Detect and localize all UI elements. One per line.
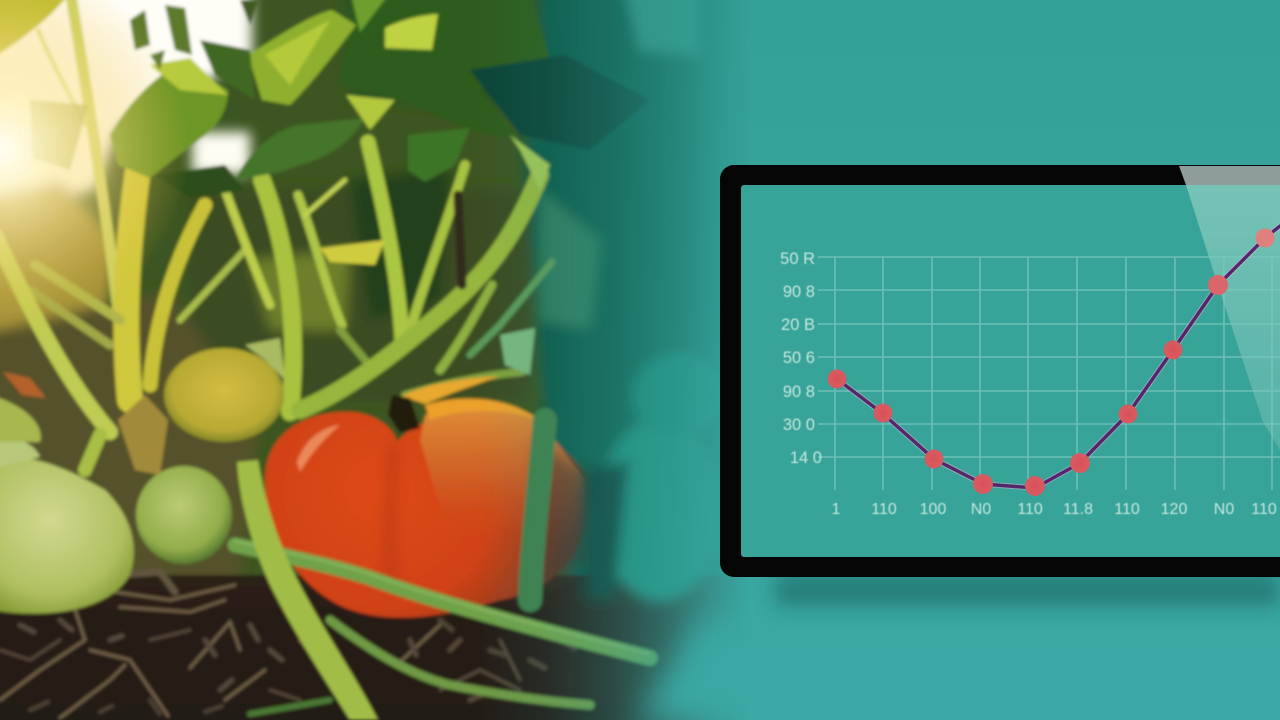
front stems and vines xyxy=(85,420,650,714)
x axis labels: 110 xyxy=(1114,501,1140,518)
y axis labels: 50 6 xyxy=(783,349,815,367)
data points xyxy=(828,228,1274,496)
sky specks xyxy=(130,5,192,70)
thick front stem xyxy=(237,460,378,720)
pale green tomato left xyxy=(0,457,134,614)
glare on bezel xyxy=(1179,166,1280,185)
x axis labels: 110 xyxy=(1251,501,1277,518)
x axis labels: 120 xyxy=(1161,501,1187,518)
x axis labels: 1 xyxy=(832,501,841,518)
x axis labels: 110 xyxy=(871,501,897,518)
y axis labels: 20 B xyxy=(781,316,815,334)
sun glow xyxy=(0,0,182,330)
tomato body xyxy=(265,411,591,618)
stem top xyxy=(388,395,420,433)
y axis labels xyxy=(780,250,822,467)
x axis labels: 110 xyxy=(1017,501,1043,518)
x axis labels: N0 xyxy=(1214,501,1234,518)
small top pale tomato xyxy=(0,437,40,470)
pale leaf by yellow tomato xyxy=(245,338,285,380)
sky and sunlight xyxy=(0,0,252,350)
tablet bezel xyxy=(720,165,1280,577)
red tomato xyxy=(265,376,595,618)
y axis labels: 14 0 xyxy=(790,449,822,467)
y axis labels: 50 R xyxy=(780,250,815,268)
y axis labels: 30 0 xyxy=(783,416,815,434)
stems xyxy=(0,0,552,432)
glare on screen xyxy=(1186,185,1280,450)
data line xyxy=(837,226,1280,488)
fading background fruits xyxy=(585,353,728,602)
tablet screen xyxy=(741,185,1280,557)
small left tomato xyxy=(0,395,41,442)
dry husk xyxy=(118,395,168,475)
soil roots and clods xyxy=(0,572,575,718)
photo: tomato plants xyxy=(0,0,736,720)
orange shoulder xyxy=(418,410,586,523)
soil xyxy=(0,575,740,720)
soil backing xyxy=(0,718,695,720)
y axis labels: 90 8 xyxy=(783,383,815,401)
x axis labels xyxy=(832,501,1277,518)
x axis labels: N0 xyxy=(971,501,991,518)
dark undergrowth xyxy=(0,0,712,577)
grid xyxy=(818,257,1280,490)
brown right flank xyxy=(542,446,588,583)
x axis labels: 11.8 xyxy=(1063,501,1093,518)
orange fruit scrap xyxy=(3,372,46,398)
leaves xyxy=(0,0,650,375)
small green tomato xyxy=(136,466,232,564)
tablet shadow xyxy=(775,574,1280,606)
y axis labels: 90 8 xyxy=(783,283,815,301)
yellow tomato xyxy=(164,348,284,442)
x axis labels: 100 xyxy=(920,501,946,518)
line chart xyxy=(780,226,1280,518)
foliage backdrop xyxy=(72,0,574,578)
tablet xyxy=(720,165,1280,577)
